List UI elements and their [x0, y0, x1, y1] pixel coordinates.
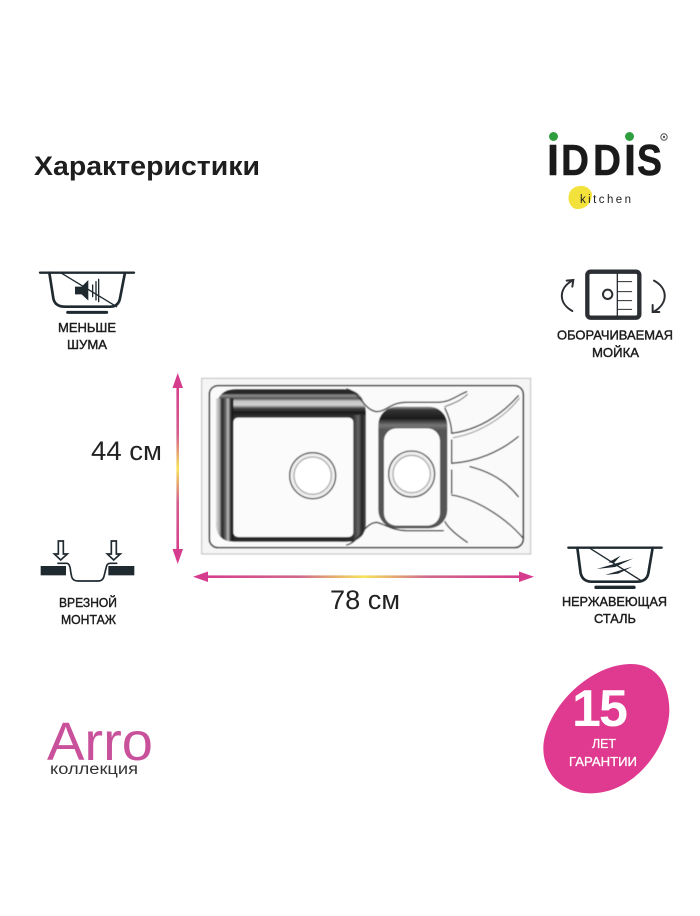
label: 78 cm: 78 см [330, 585, 400, 615]
label: flush mount: ВРЕЗНОЙ [59, 595, 117, 610]
arrow: width [193, 572, 534, 582]
large bowl [216, 389, 366, 542]
sink plate [202, 378, 531, 554]
label: less noise: МЕНЬШЕ [58, 321, 116, 335]
icon: stainless steel [568, 548, 662, 587]
badge caption: ЛЕТ [592, 737, 616, 751]
collection name: коллекция [50, 761, 138, 778]
badge: 15 year warranty: ГАРАНТИИ [569, 755, 637, 769]
label: reversible sink: МОЙКА [592, 345, 640, 360]
badge number: 5 [599, 680, 628, 738]
icon: flush mount [41, 541, 134, 581]
drainboard grooves [347, 389, 523, 545]
logo wordmark [547, 136, 662, 185]
label: stainless steel: НЕРЖАВЕЮЩАЯ [562, 595, 667, 609]
label: flush mount [59, 595, 117, 627]
icon: reversible sink [562, 272, 665, 318]
sink photo [202, 378, 531, 554]
logo: IDDIS kitchen [547, 132, 667, 209]
collection name: Arro [47, 712, 153, 772]
label: reversible sink [557, 328, 673, 360]
logo wordmark: S [637, 136, 662, 185]
logo wordmark: D [593, 136, 621, 185]
label: less noise [58, 321, 116, 352]
label: stainless steel [562, 595, 667, 626]
logo subtitle: kitchen [580, 194, 631, 206]
label: reversible sink: ОБОРАЧИВАЕМАЯ [557, 328, 673, 342]
label: stainless steel: СТАЛЬ [594, 612, 636, 626]
logo wordmark: D [561, 136, 589, 185]
logo wordmark: I [624, 136, 636, 185]
badge number: 1 [572, 680, 601, 738]
label: less noise: ШУМА [67, 338, 108, 352]
label: flush mount: МОНТАЖ [61, 613, 116, 627]
badge: 15 year warranty [543, 664, 669, 793]
icon: less noise [40, 273, 134, 312]
small bowl [378, 407, 447, 528]
arrow: height [172, 373, 183, 564]
label: 44 cm: 44 см [91, 436, 162, 466]
title: Характеристики [34, 151, 260, 181]
logo wordmark: I [547, 136, 559, 185]
